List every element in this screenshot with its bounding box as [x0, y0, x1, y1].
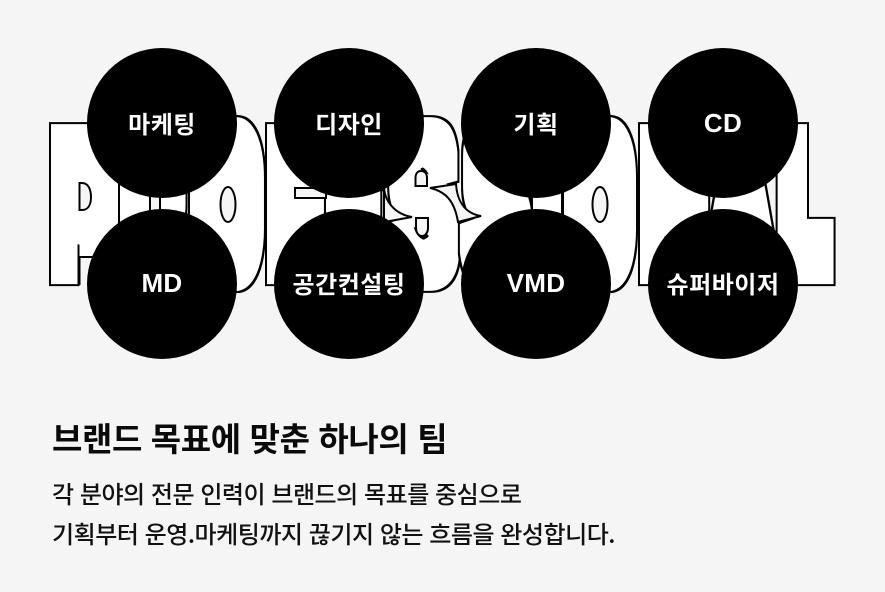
circle: 기획: 기획	[513, 104, 559, 140]
body text: 기획부터 운영.마케팅까지 끊기지 않는 흐름을 완성합니다.	[52, 515, 615, 550]
circle: 슈퍼바이저: 슈퍼바이저	[667, 265, 779, 300]
heading: 브랜드 목표에 맞춘 하나의 팀	[52, 413, 447, 461]
outlined word: PROFESSIONAL: A	[712, 113, 770, 296]
circle: 마케팅: 마케팅	[128, 104, 196, 140]
circle: CD	[648, 48, 798, 198]
circle: MD	[87, 208, 237, 358]
outlined word: PROFESSIONAL: O	[195, 105, 259, 301]
circle: 디자인	[274, 48, 424, 198]
outlined word: PROFESSIONAL: I	[532, 112, 562, 296]
outlined word: PROFESSIONAL: S	[389, 90, 457, 319]
outlined word: PROFESSIONAL: F	[267, 113, 322, 297]
circle: 공간컨설팅: 공간컨설팅	[293, 265, 405, 300]
circle: VMD	[461, 208, 611, 358]
outlined word: PROFESSIONAL: E	[326, 112, 382, 296]
outlined word: PROFESSIONAL: R	[120, 113, 184, 297]
circle: MD: MD	[141, 268, 183, 298]
outlined word: PROFESSIONAL: L	[782, 112, 826, 296]
circle: VMD: VMD	[507, 268, 565, 298]
letter counters and notches	[79, 171, 608, 285]
circle: 슈퍼바이저	[648, 208, 798, 358]
circle: 마케팅	[87, 48, 237, 198]
outlined word: PROFESSIONAL: P	[50, 112, 117, 296]
circle: CD: CD	[704, 108, 742, 138]
circle: 공간컨설팅	[274, 208, 424, 358]
outlined word: PROFESSIONAL: N	[640, 113, 709, 296]
body text: 각 분야의 전문 인력이 브랜드의 목표를 중심으로	[52, 475, 521, 510]
circle: 디자인: 디자인	[315, 104, 383, 140]
outlined word: PROFESSIONAL: S	[463, 90, 529, 319]
circle: 기획	[461, 48, 611, 198]
outlined word: PROFESSIONAL: O	[569, 106, 631, 302]
body text	[52, 475, 615, 550]
